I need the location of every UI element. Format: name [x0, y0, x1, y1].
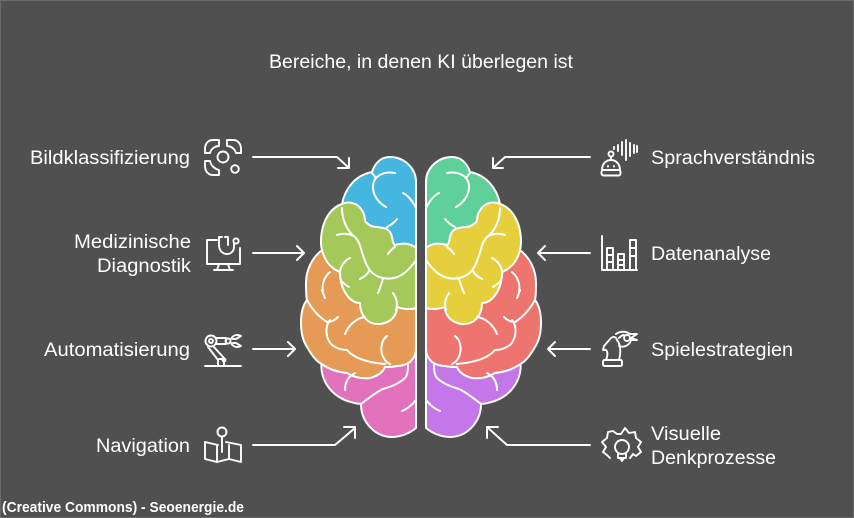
- lobe: purple: [426, 340, 521, 437]
- icon: robot arm: [205, 335, 241, 366]
- arrow: Automatisierung to brain: [253, 342, 295, 356]
- icon: image recognition: [205, 140, 241, 175]
- icon: voice robot: [602, 140, 637, 176]
- label: Visuelle Denkprozesse: [651, 424, 776, 469]
- footer credit: (Creative Commons) - Seoenergie.de: [2, 500, 244, 516]
- arrow: Bildklassifizierung to brain: [253, 157, 349, 168]
- brain folds: right: [426, 173, 535, 411]
- label: Automatisierung: Automatisierung: [44, 340, 190, 361]
- arrow: brain to Sprachverständnis: [493, 157, 590, 168]
- label: Medizinische Diagnostik: Medizinische: [74, 232, 191, 253]
- label: Datenanalyse: Datenanalyse: [651, 244, 771, 265]
- label: Visuelle Denkprozesse: Visuelle: [651, 424, 721, 445]
- arrow: brain to Datenanalyse: [538, 246, 590, 260]
- icon: gear with light bulb: [602, 428, 641, 461]
- arrow: Navigation to brain: [253, 427, 355, 445]
- arrow: brain to Visuelle Denkprozesse: [487, 427, 590, 445]
- lobe: green: [321, 203, 416, 324]
- lobe: red: [426, 250, 541, 378]
- label: Bildklassifizierung: Bildklassifizierung: [30, 148, 190, 169]
- icon: stethoscope and monitor: [207, 237, 240, 270]
- label: Spielestrategien: Spielestrategien: [651, 340, 793, 361]
- brain: left hemisphere: [301, 157, 416, 437]
- arrow: Medizinische Diagnostik to brain: [253, 246, 304, 260]
- label: Sprachverständnis: Sprachverständnis: [651, 148, 815, 169]
- icon: map with pin: [205, 428, 241, 462]
- lobe: teal: [426, 157, 500, 262]
- brain folds: left: [307, 173, 416, 411]
- lobe: blue: [342, 157, 416, 262]
- title: Bereiche, in denen KI überlegen ist: [269, 52, 574, 73]
- label: Medizinische Diagnostik: [74, 232, 192, 277]
- lobe: yellow: [426, 203, 521, 324]
- icon: bar chart: [602, 236, 637, 270]
- brain: right hemisphere: [426, 157, 541, 437]
- label: Visuelle Denkprozesse: Denkprozesse: [651, 448, 776, 469]
- arrow: brain to Spielestrategien: [548, 342, 590, 356]
- label: Medizinische Diagnostik: Diagnostik: [97, 256, 192, 277]
- icon: chess knight with robot hand: [603, 332, 637, 366]
- lobe: orange: [301, 250, 416, 378]
- label: Navigation: Navigation: [96, 436, 190, 457]
- lobe: pink: [321, 340, 416, 437]
